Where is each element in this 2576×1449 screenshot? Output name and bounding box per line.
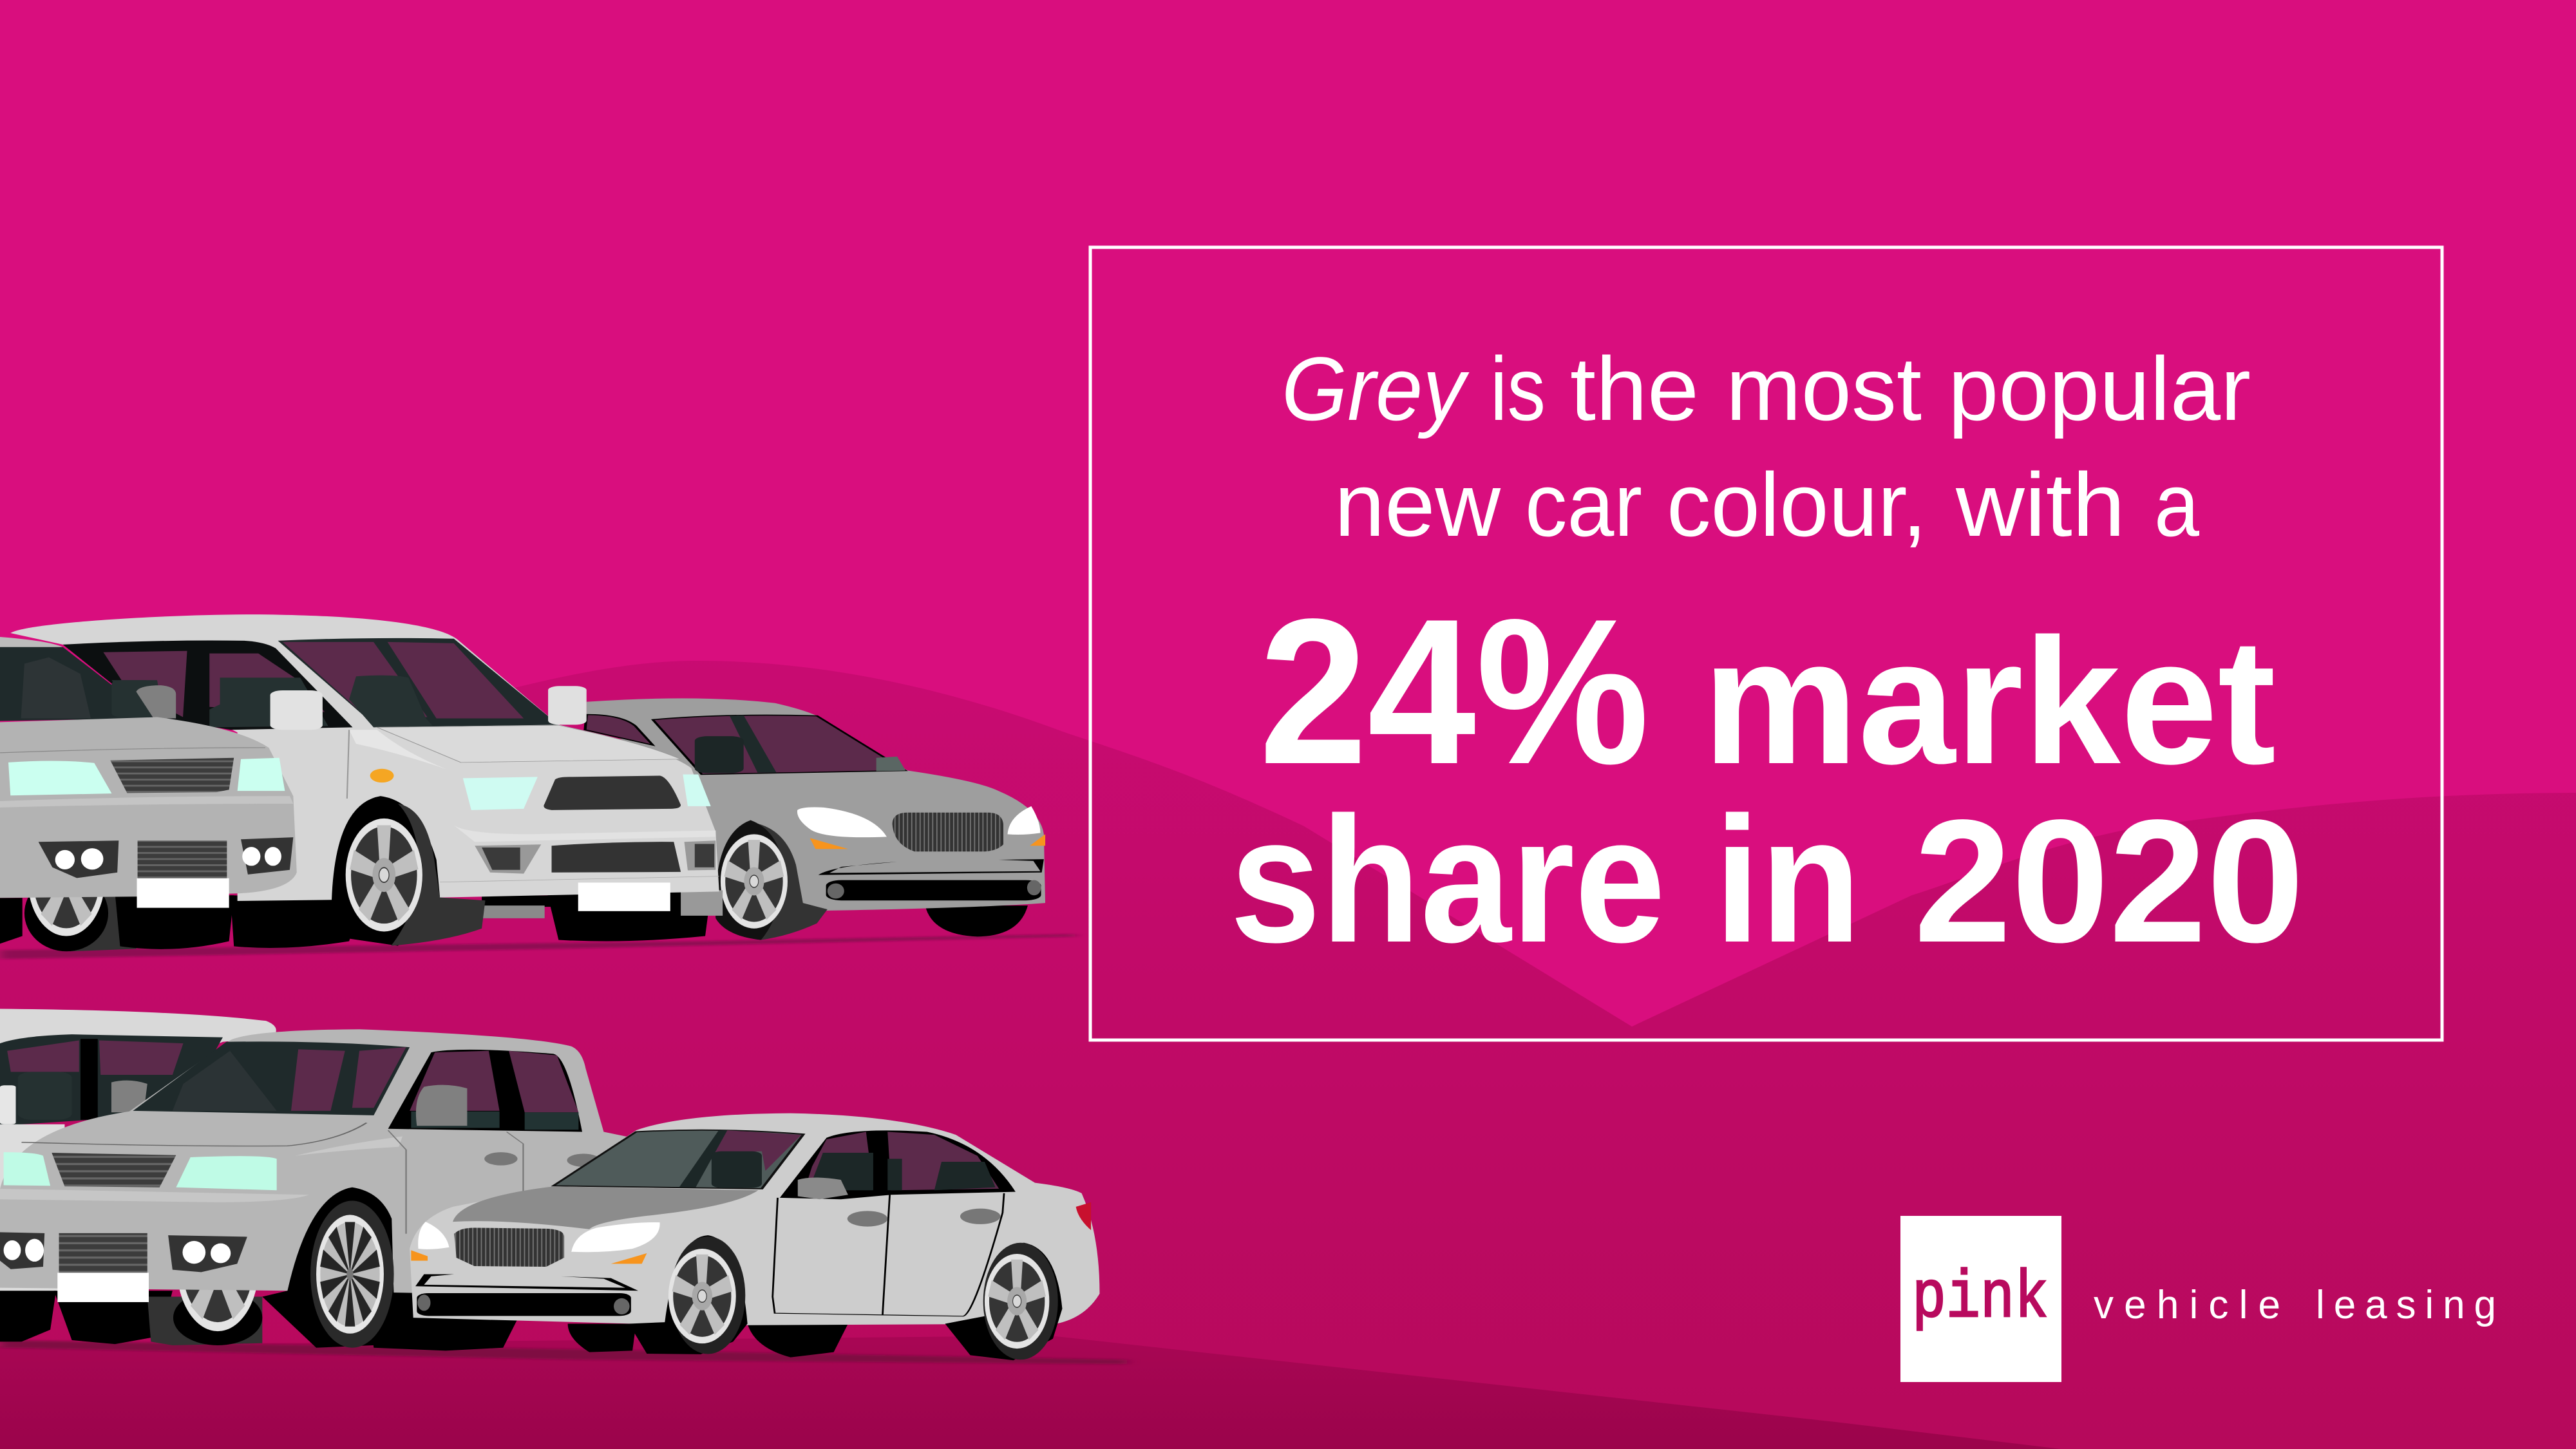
headline: line 1 (1259, 576, 2276, 808)
text: intro line 2: new (1334, 454, 1501, 555)
headline: line 1: 24% (1259, 576, 1649, 808)
bottom row of cars (0, 1009, 1127, 1364)
text: intro line 1: most (1726, 338, 1922, 439)
text: intro line 2: a (2154, 454, 2199, 555)
text: intro line 2: with (1955, 454, 2125, 555)
logo: pink vehicle leasing: vehicle (2094, 1283, 2280, 1327)
car: white SUV (10, 614, 723, 948)
ground shadow: top row (0, 934, 1075, 959)
text: intro line 1: Grey (1282, 338, 1470, 439)
text: intro line 2 (1334, 454, 2199, 555)
logo: pink vehicle leasing: pink (1912, 1261, 2049, 1337)
car: white SUV behind (0, 1009, 276, 1295)
text: intro line 1 (1282, 338, 2251, 439)
headline: line 2: share (1230, 779, 1665, 980)
text: intro line 1: the (1570, 338, 1699, 439)
headline: line 2 (1230, 779, 2304, 980)
text: intro line 1: popular (1948, 338, 2251, 439)
ground shadow: bottom row (0, 1340, 1127, 1364)
callout panel: market share (1090, 247, 2442, 1040)
car: grey SUV in front (0, 637, 297, 951)
logo: pink vehicle leasing (1900, 1216, 2496, 1382)
headline: line 1: market (1703, 601, 2276, 801)
headline: line 2: 2020 (1914, 783, 2304, 979)
text: intro line 2: colour, (1667, 454, 1927, 555)
headline: line 2: in (1714, 779, 1861, 980)
logo: pink vehicle leasing: leasing (2316, 1283, 2496, 1327)
top row of cars (0, 614, 1075, 959)
text: intro line 2: car (1525, 454, 1642, 555)
car: grey saloon (585, 698, 1045, 940)
car: white saloon (410, 1113, 1099, 1360)
text: intro line 1: is (1490, 338, 1546, 439)
car: grey pick-up (0, 1029, 632, 1350)
